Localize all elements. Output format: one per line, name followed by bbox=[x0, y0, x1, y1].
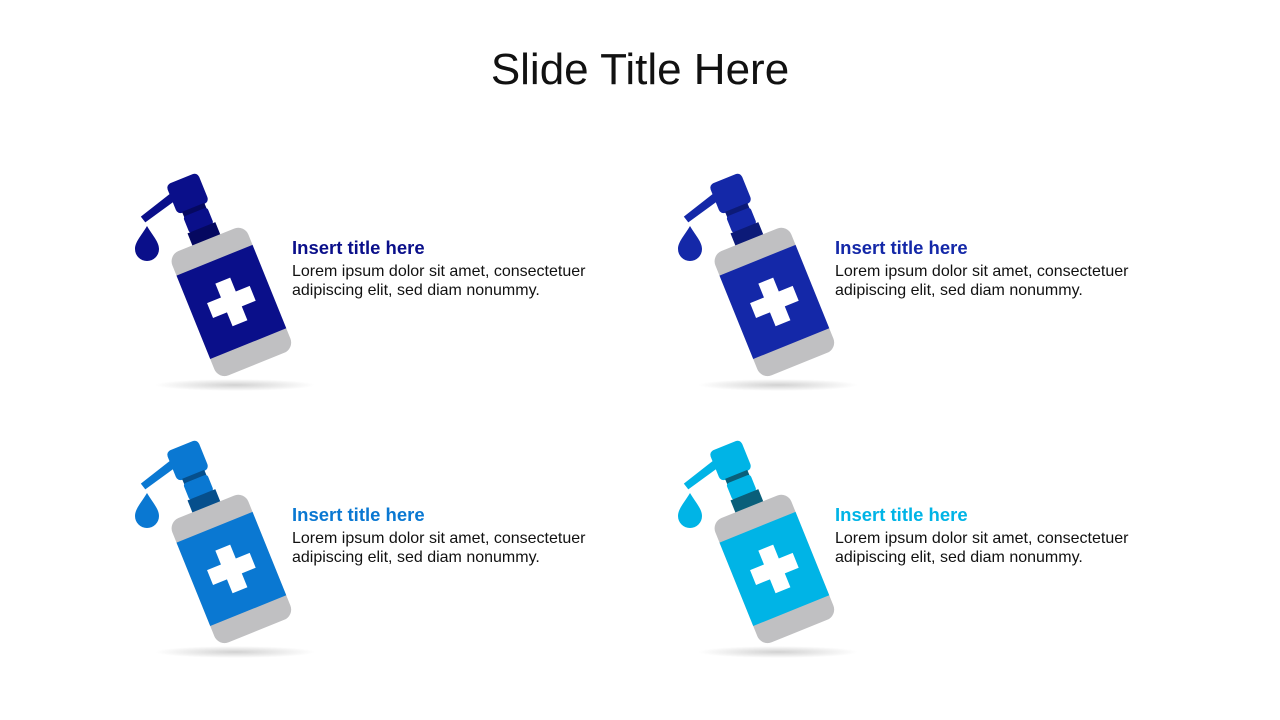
text block 1: Insert title here bbox=[292, 237, 425, 258]
bottle 3 bbox=[133, 430, 315, 658]
text block 2 bbox=[835, 237, 1128, 299]
text block 3: Insert title here bbox=[292, 504, 425, 525]
text block 2: Insert title here bbox=[835, 237, 968, 258]
bottle 2 bbox=[676, 163, 858, 391]
text block 1 bbox=[292, 237, 586, 299]
text block 4: Insert title here bbox=[835, 504, 968, 525]
text block 3: Lorem ipsum dolor sit amet, consectetuer adipiscing elit, sed diam nonummy. bbox=[292, 530, 585, 566]
title: Slide Title Here bbox=[491, 45, 789, 94]
text block 1: Lorem ipsum dolor sit amet, consectetuer adipiscing elit, sed diam nonummy. bbox=[292, 263, 585, 299]
text block 4 bbox=[835, 504, 1128, 566]
text block 4: Lorem ipsum dolor sit amet, consectetuer adipiscing elit, sed diam nonummy. bbox=[835, 530, 1128, 566]
bottle 4 bbox=[676, 430, 858, 658]
bottle 1 bbox=[133, 163, 315, 391]
text block 2: Lorem ipsum dolor sit amet, consectetuer adipiscing elit, sed diam nonummy. bbox=[835, 263, 1128, 299]
text block 3 bbox=[292, 504, 586, 566]
